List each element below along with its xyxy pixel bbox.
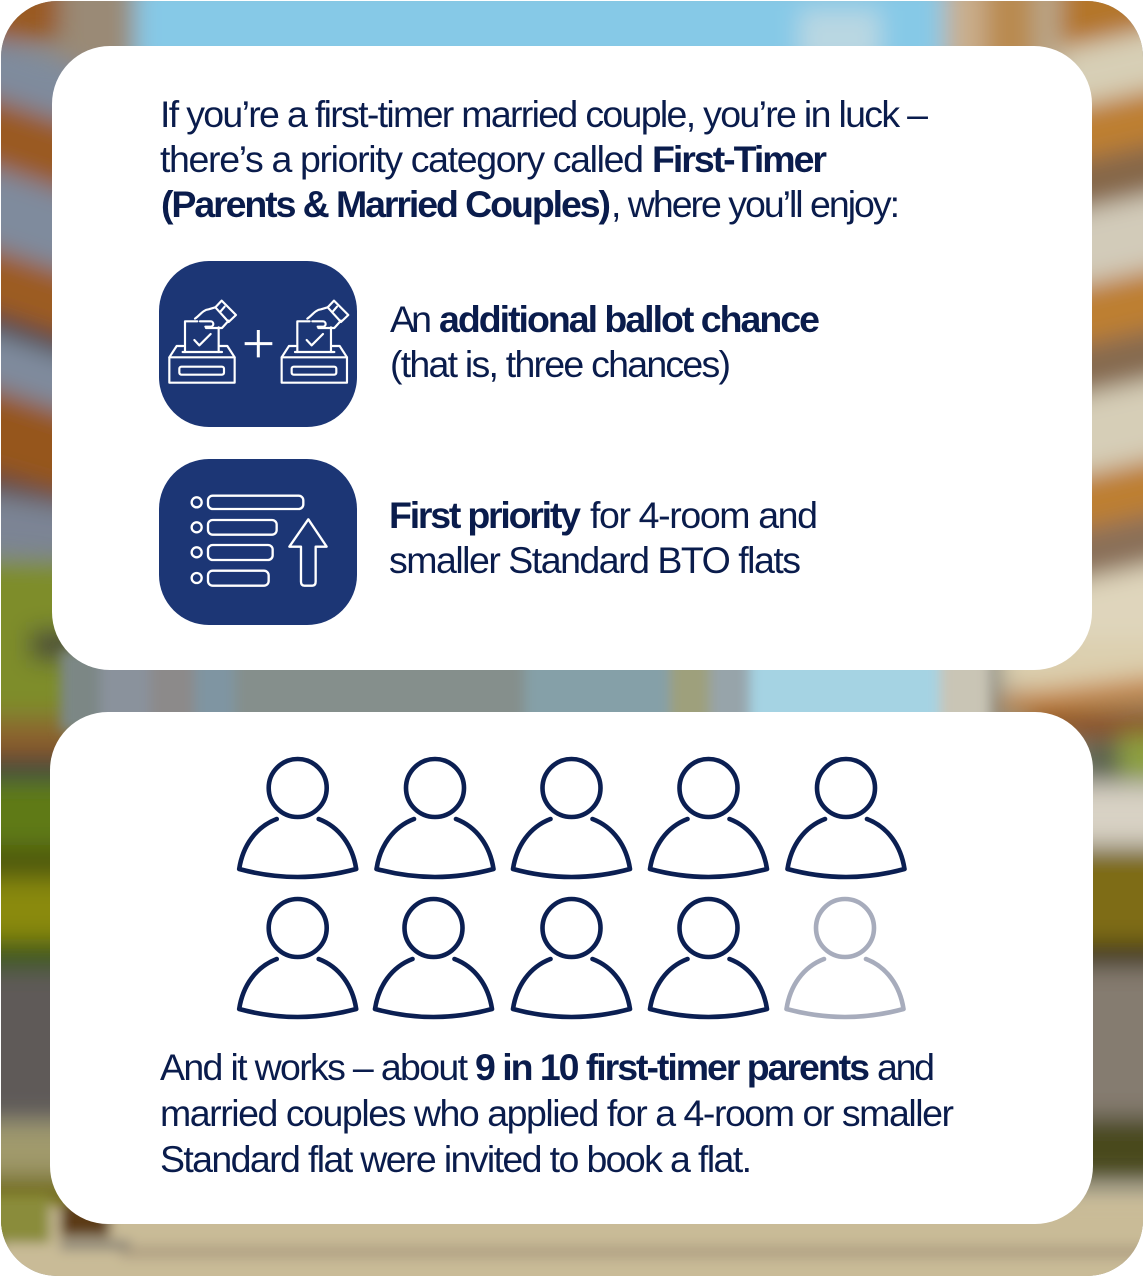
ground at bottom [0,1205,1144,1277]
panel: nine in ten card [50,712,1093,1224]
middle band between cards [60,650,120,732]
text: first priority: First priority [389,494,581,536]
text: 9 in 10 statistic: and [877,1046,935,1088]
intro text: there’s a priority category called [160,138,644,180]
intro text: If you’re a first-timer married couple, you’re in luck – [160,93,928,135]
intro text: First-Timer [652,138,827,180]
intro text [160,93,928,225]
text: first priority: smaller Standard BTO flats [389,539,801,581]
text: additional ballot chance: An [390,298,432,340]
text: 9 in 10 statistic [160,1046,954,1180]
icon: ranked list with up arrow [159,459,357,625]
text: additional ballot chance: (that is, three chances) [390,343,731,385]
text: first priority [389,494,818,581]
panel: priority benefits card [52,46,1092,670]
intro text: (Parents & Married Couples) [161,183,611,225]
text: 9 in 10 statistic: 9 in 10 first-timer parents [475,1046,870,1088]
left strip stripes [0,30,90,130]
text: 9 in 10 statistic: Standard flat were invited to book a flat. [160,1138,752,1180]
pictogram: nine of ten people highlighted [239,759,904,1017]
icon: two ballot boxes with plus [159,261,357,427]
text: 9 in 10 statistic: married couples who applied for a 4-room or smaller [160,1092,954,1134]
sky at top [116,1,962,46]
intro text: , where you’ll enjoy: [611,183,900,225]
text: 9 in 10 statistic: And it works – about [160,1046,469,1088]
text: additional ballot chance [390,298,820,385]
right strip stripes [1062,30,1086,50]
text: first priority: for 4-room and [590,494,818,536]
text: additional ballot chance: additional ballot chance [439,298,820,340]
